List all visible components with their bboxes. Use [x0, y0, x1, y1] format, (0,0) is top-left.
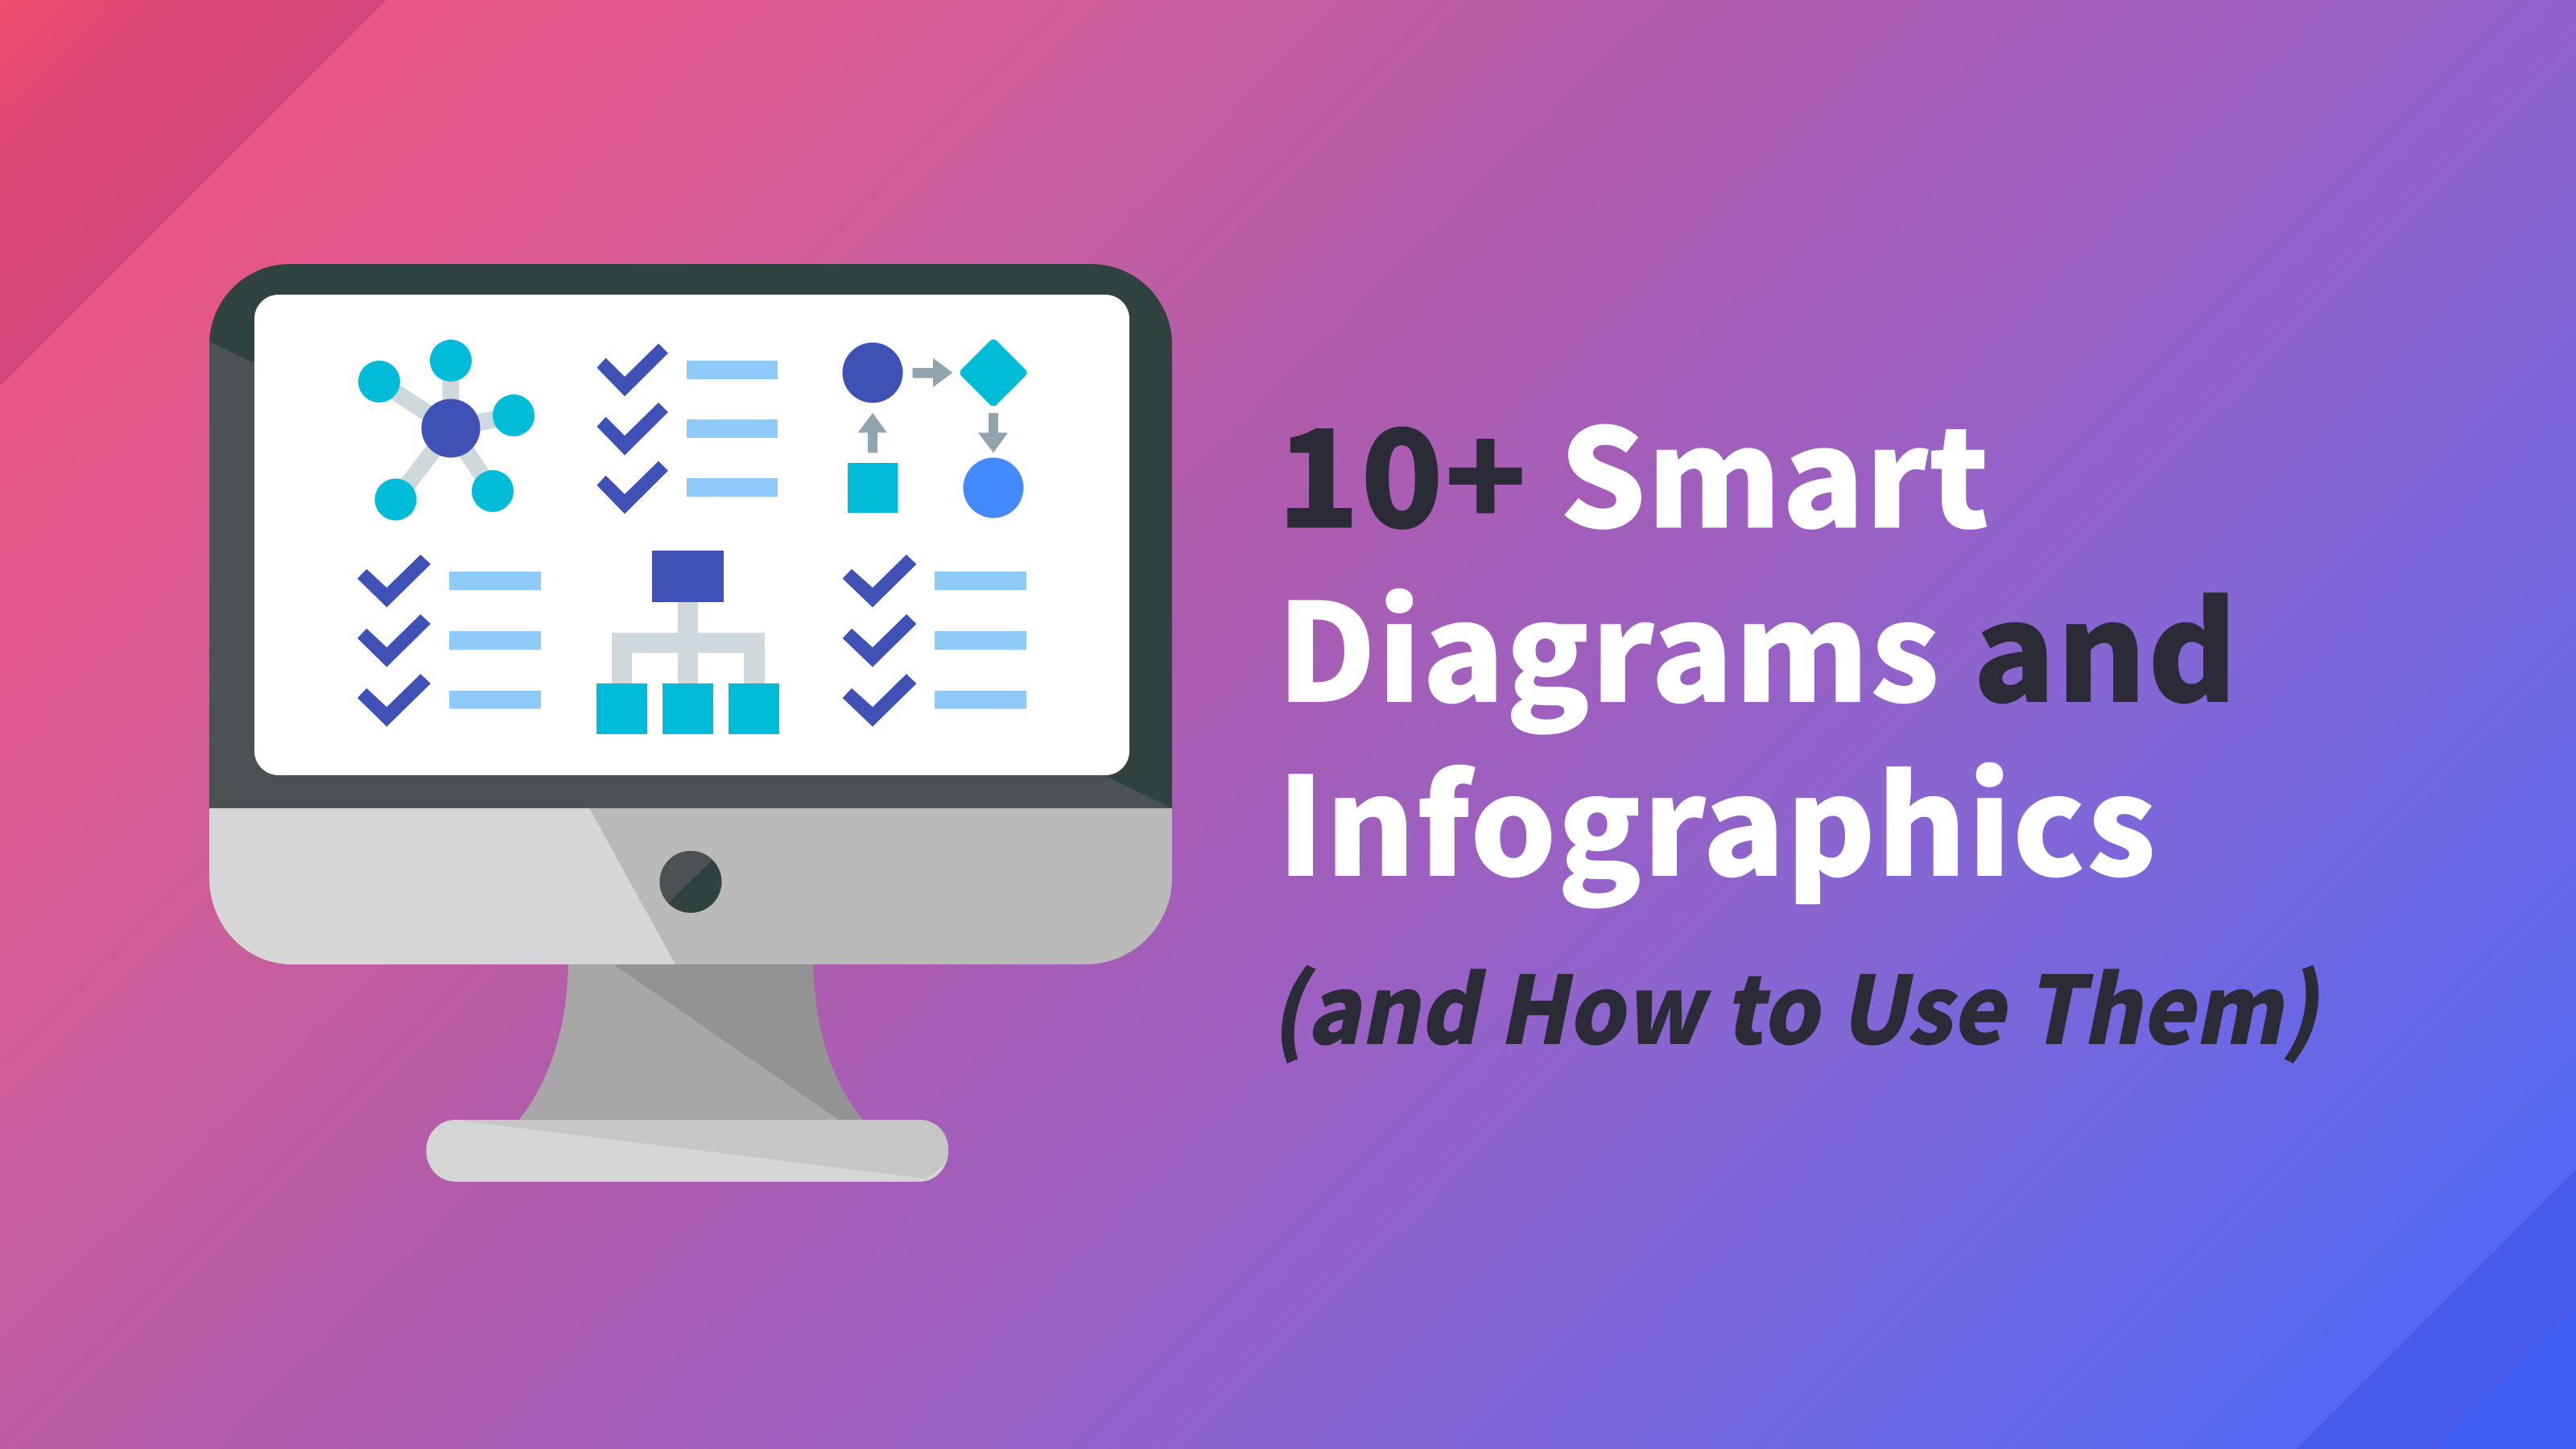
- checklist: top centre: [597, 344, 778, 514]
- title: 10+ Smart: [1277, 369, 1990, 567]
- title: [1277, 369, 2238, 915]
- monitor illustration: [209, 264, 1172, 1182]
- monitor stand neck: [519, 964, 862, 1120]
- title: Infographics: [1277, 717, 2157, 915]
- network diagram: [358, 340, 535, 520]
- monitor bezel: [209, 264, 1172, 808]
- monitor power button: [660, 851, 721, 913]
- monitor chin: [209, 808, 1172, 964]
- subtitle: (and How to Use Them): [1265, 935, 2339, 1072]
- title: Diagrams and: [1277, 543, 2238, 741]
- monitor stand base: [427, 1120, 948, 1182]
- org chart: [597, 551, 779, 734]
- checklist: bottom right: [843, 555, 1026, 727]
- monitor screen: [254, 295, 1129, 775]
- background: top-left diagonal band: [0, 0, 386, 386]
- background: bottom-right diagonal band: [2182, 1055, 2576, 1449]
- checklist: bottom left: [357, 555, 541, 727]
- flow diagram: [842, 337, 1029, 518]
